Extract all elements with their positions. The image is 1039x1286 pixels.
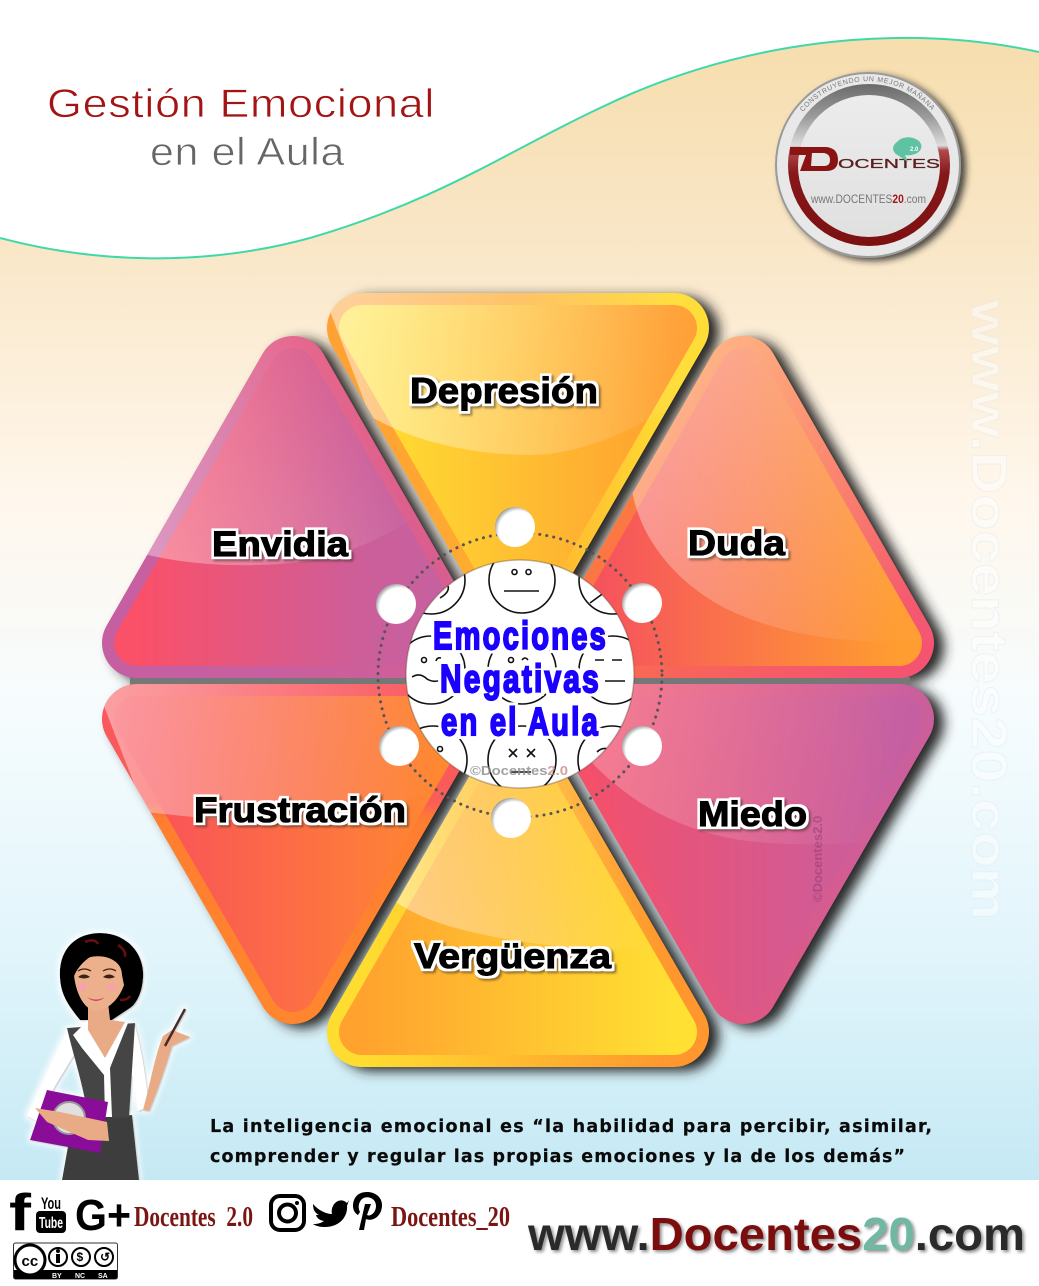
panel: Envidia: [137, 300, 460, 643]
title: en el Aula: [150, 131, 345, 174]
label: Frustración: Frustración: [194, 791, 406, 830]
website URL: www.Docentes20.com: [527, 1208, 1025, 1260]
icon: Facebook: f: [9, 1184, 32, 1242]
connector holes: [376, 507, 662, 838]
small rotated watermark: ©Docentes2.0: [810, 816, 825, 902]
logo: Docentes 2.0 badge: 2.0: [910, 147, 919, 153]
label: Duda: Duda: [688, 524, 786, 563]
icon: Pinterest: [353, 1192, 382, 1230]
vertical watermark: www.Docentes20.com: [961, 299, 1017, 920]
panel: Miedo: [580, 680, 950, 989]
logo: Docentes 2.0 badge: CONSTRUYENDO UN MEJOR MAÑANA: [800, 76, 934, 111]
centre heading: [433, 615, 608, 744]
icon: YouTube: [36, 1194, 66, 1233]
white wave header: [0, 0, 1039, 258]
icon: Twitter: [313, 1200, 349, 1227]
Creative Commons licence badge: ↺: [100, 1250, 110, 1264]
icon: Instagram: [271, 1196, 304, 1230]
footer band: [0, 1180, 1039, 1286]
quote: La inteligencia emocional es “la habilidad para percibir, asimilar,: [210, 1117, 932, 1137]
icon: YouTube: Tube: [39, 1215, 63, 1232]
quote: comprender y regular las propias emociones y la de los demás”: [210, 1147, 905, 1167]
centre circle: [405, 559, 635, 789]
panel: Duda: [587, 320, 940, 643]
label: Depresión: Depresión: [410, 370, 598, 411]
label: Envidia: Envidia: [212, 525, 349, 564]
smiley faces pattern: [408, 562, 632, 787]
Creative Commons licence badge: $: [76, 1250, 84, 1264]
icon: Google Plus: G+: [75, 1191, 131, 1240]
centre heading: Emociones: [433, 615, 608, 658]
title: [47, 82, 435, 174]
Creative Commons licence badge: BY: [52, 1273, 62, 1280]
Creative Commons licence badge: NC: [75, 1273, 85, 1280]
panel: Frustración: [90, 670, 470, 989]
centre watermark: ©Docentes 2.0: [470, 763, 568, 778]
logo: Docentes 2.0 badge: [774, 70, 972, 266]
Creative Commons licence badge: SA: [98, 1273, 108, 1280]
panel: Vergüenza: [300, 740, 720, 1032]
handle: Docentes 2.0: Docentes 2.0: [134, 1201, 253, 1233]
hexagon shadows: [147, 332, 909, 1036]
Creative Commons licence badge: [14, 1243, 118, 1280]
logo: Docentes 2.0 badge: OCENTES: [838, 156, 941, 171]
label: Vergüenza: Vergüenza: [414, 937, 612, 976]
icon: YouTube: You: [41, 1194, 61, 1213]
centre heading: en el Aula: [441, 701, 600, 744]
teacher illustration: [27, 933, 190, 1180]
central divider strip: [130, 677, 910, 685]
centre heading: Negativas: [440, 658, 601, 701]
dotted ring: [378, 533, 662, 817]
quote: [210, 1117, 932, 1167]
title: Gestión Emocional: [47, 82, 435, 126]
logo: Docentes 2.0 badge: www.DOCENTES20.com: [810, 192, 926, 206]
label: Miedo: Miedo: [698, 795, 807, 834]
Creative Commons licence badge: cc: [22, 1253, 38, 1270]
panel: Depresión: [327, 293, 709, 574]
handle: Docentes_20: Docentes_20: [391, 1201, 510, 1233]
